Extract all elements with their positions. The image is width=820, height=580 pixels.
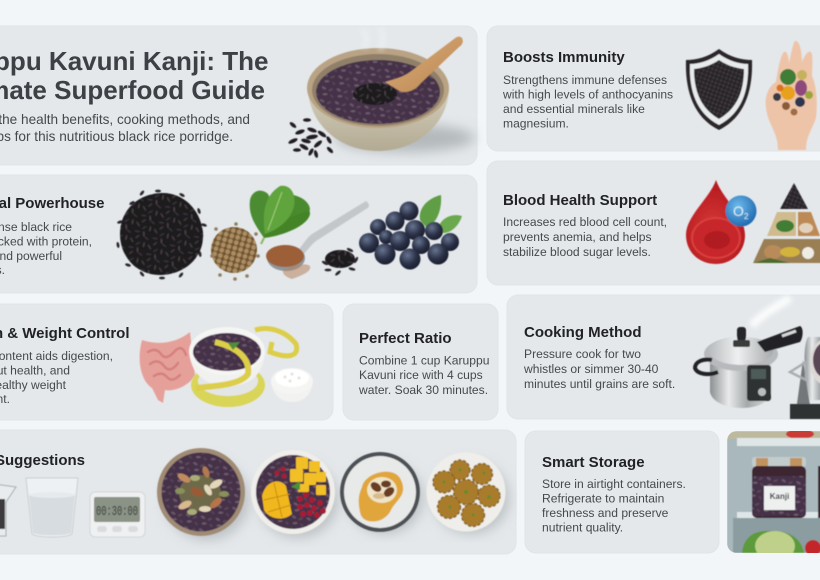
panel: boosts immunity	[487, 26, 820, 151]
text block	[523, 347, 675, 391]
text block: water. Soak 30 minutes.	[358, 383, 488, 397]
text block	[0, 349, 113, 406]
text block: stabilize blood sugar levels.	[503, 245, 651, 259]
panel: title hero	[0, 26, 477, 165]
text block: minutes until grains are soft.	[524, 377, 675, 391]
heading: Smart Storage	[542, 454, 645, 471]
icon: intestines	[140, 332, 195, 403]
icon: blueberries with leaves	[359, 195, 462, 270]
icon: food pyramid	[753, 183, 820, 263]
icon: bowl of kanji with wooden spoon	[307, 28, 475, 152]
text block: nutrient quality.	[542, 520, 623, 534]
icon: digital timer	[90, 492, 145, 537]
text block	[0, 220, 92, 277]
text block: magnesium.	[503, 116, 569, 130]
text block: Kavuni rice with 4 cups	[359, 368, 483, 382]
icon: white bowl of rice	[271, 368, 313, 402]
text block: Refrigerate to maintain	[542, 492, 664, 506]
text block	[502, 73, 673, 130]
text block: Strengthens immune defenses	[503, 73, 667, 87]
text block: prevents anemia, and helps	[503, 230, 652, 244]
text block	[542, 477, 686, 534]
panel: cooking method	[507, 295, 820, 419]
panel: fridge photo	[727, 429, 820, 561]
icon: measuring cup	[0, 484, 16, 536]
icon: hand holding foods	[766, 41, 817, 150]
title	[0, 46, 268, 105]
icon: spinach leaves	[250, 186, 310, 244]
text block	[503, 215, 667, 259]
heading: Perfect Ratio	[359, 330, 452, 347]
icon: kanji jar: Kanji	[770, 492, 789, 501]
icon: blood drop with oxygen: O	[733, 203, 744, 219]
icon: scattered black rice	[288, 118, 334, 158]
heading: Blood Health Support	[503, 192, 657, 209]
text block: Increases red blood cell count,	[503, 215, 667, 229]
heading: Boosts Immunity	[503, 49, 625, 66]
icon: bowl with measuring tape	[189, 327, 297, 407]
panel: smart storage	[525, 431, 719, 553]
icon: spoon with powder	[266, 201, 369, 279]
icon: lentils	[210, 222, 260, 281]
icon: bowl with nuts	[157, 448, 249, 540]
panel: blood health support	[487, 161, 820, 285]
panel: digestion and weight control	[0, 304, 333, 420]
icon: cabbage	[742, 530, 804, 553]
text block: Store in airtight containers.	[542, 477, 686, 491]
icon: digital timer: 00:30:00	[96, 504, 138, 520]
text block: with high levels of anthocyanins	[502, 88, 673, 102]
panel: serving suggestions	[0, 430, 516, 554]
heading: Cooking Method	[524, 324, 641, 341]
icon: black rice pile	[116, 190, 207, 279]
icon: pot on stove	[790, 337, 820, 419]
icon: blood drop with oxygen	[686, 180, 756, 264]
text block: freshness and preserve	[542, 506, 669, 520]
icon: bowl with mango and pomegranate	[251, 450, 338, 538]
text block: whistles or simmer 30-40	[523, 362, 659, 376]
panel: nutritional powerhouse	[0, 175, 477, 293]
text block: Combine 1 cup Karuppu	[359, 354, 489, 368]
panel: perfect ratio	[343, 304, 498, 420]
icon: glass of water	[26, 478, 78, 537]
icon: blood drop with oxygen: 2	[744, 212, 749, 221]
text block: Pressure cook for two	[524, 347, 641, 361]
text block	[358, 354, 489, 397]
icon: pressure cooker	[695, 298, 803, 408]
icon: bowl with honey and nuts	[340, 452, 423, 534]
icon: rice shield	[686, 49, 752, 130]
subtitle	[0, 112, 250, 144]
icon: small black rice	[321, 247, 359, 276]
text block: and essential minerals like	[503, 102, 645, 116]
icon: plate of fritters	[426, 452, 509, 534]
